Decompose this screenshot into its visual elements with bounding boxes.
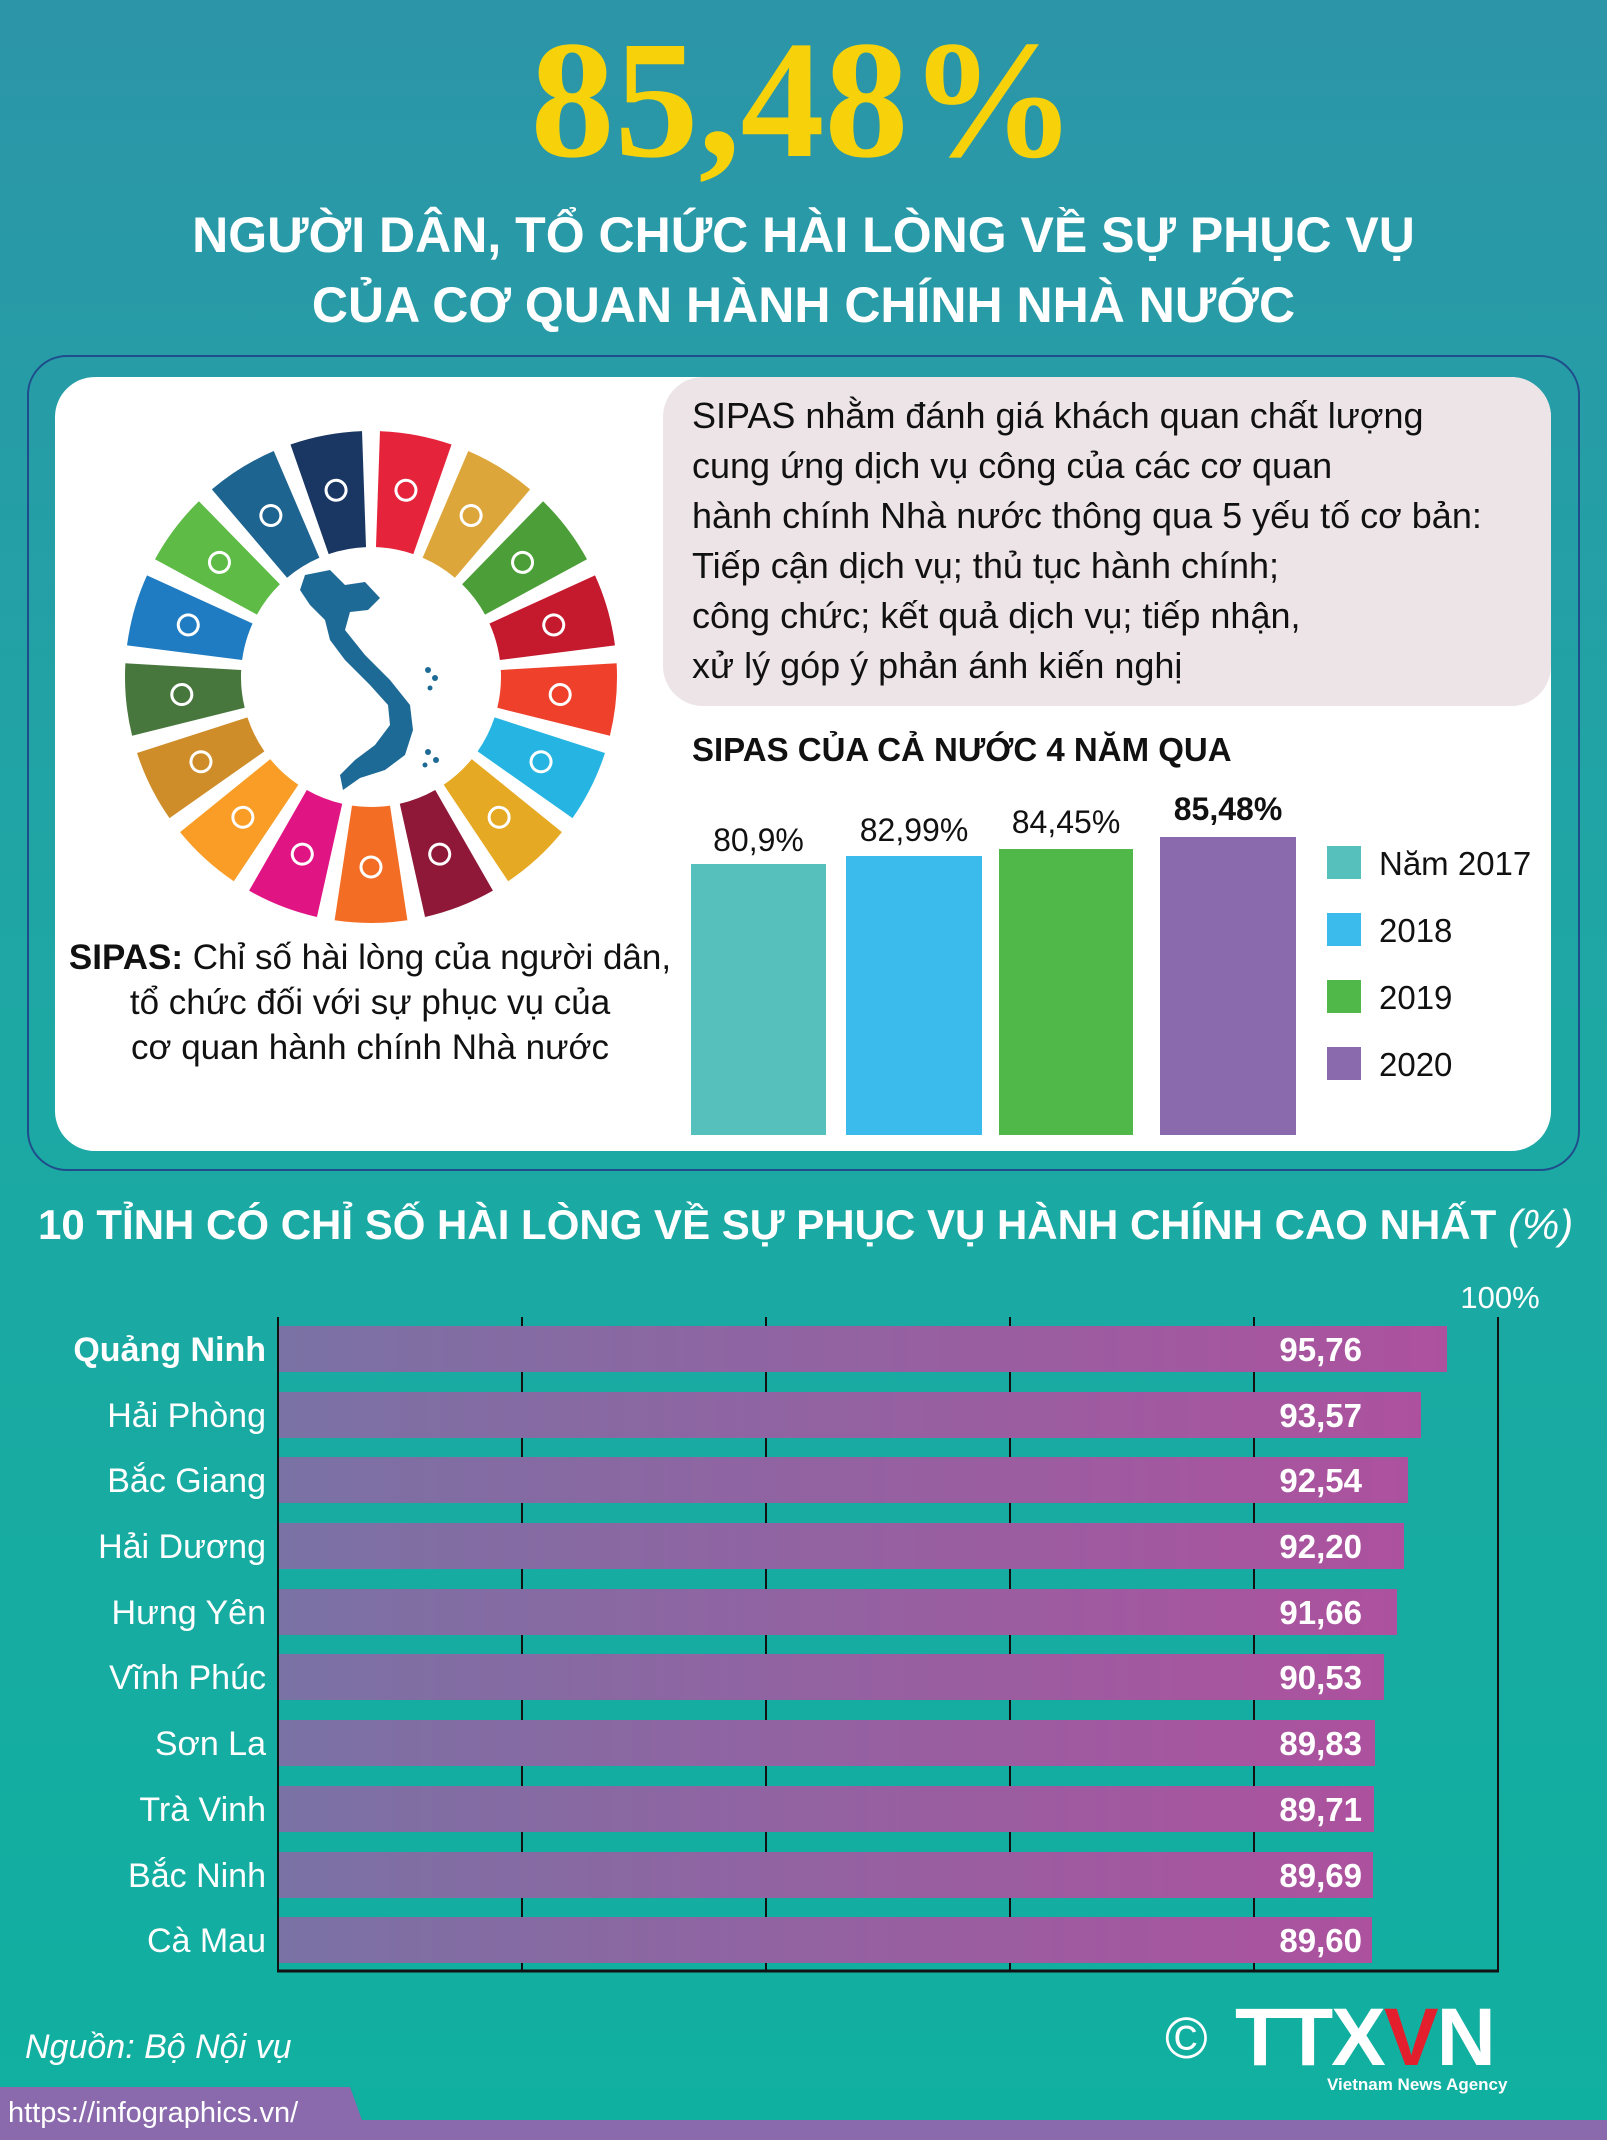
- callout: SIPAS description box: công chức; kết quả dịch vụ; tiếp nhận,: [692, 595, 1300, 636]
- text block: source: Nguồn: Bộ Nội vụ: [25, 2028, 292, 2066]
- legend: 2018: [1379, 912, 1452, 949]
- axis label 100%: 100%: [1460, 1280, 1540, 1315]
- callout: SIPAS description box: hành chính Nhà nước thông qua 5 yếu tố cơ bản:: [692, 495, 1482, 536]
- text block: SIPAS definition: [69, 938, 671, 1067]
- legend: 2019: [1379, 979, 1452, 1016]
- bar 2017: [691, 864, 826, 1135]
- bar chart: top 10 provinces: 92,54: [1279, 1462, 1363, 1499]
- logo: TTXVN: Vietnam News Agency: [1327, 2075, 1507, 2094]
- callout: SIPAS description box: [663, 377, 1551, 706]
- logo: TTXVN: TTXVN: [1235, 1992, 1494, 2083]
- bar chart: top 10 provinces: Hải Phòng: [107, 1397, 266, 1435]
- bar chart: top 10 provinces: Bắc Ninh: [128, 1857, 266, 1895]
- logo: TTXVN: [1165, 1992, 1508, 2094]
- heading: national chart: SIPAS CỦA CẢ NƯỚC 4 NĂM QUA: [692, 731, 1232, 768]
- subtitle: NGƯỜI DÂN, TỔ CHỨC HÀI LÒNG VỀ SỰ PHỤC VỤ: [192, 207, 1415, 263]
- logo: TTXVN: ©: [1165, 2006, 1208, 2071]
- bar chart: top 10 provinces: Bắc Giang: [107, 1462, 266, 1500]
- bar chart: top 10 provinces: Trà Vinh: [139, 1791, 266, 1829]
- bar chart: top 10 provinces: 90,53: [1279, 1659, 1362, 1696]
- bar chart: national SIPAS 2017-2020: 85,48%: [1174, 791, 1282, 827]
- callout: SIPAS description box: SIPAS nhằm đánh giá khách quan chất lượng: [692, 395, 1424, 436]
- bar chart: top 10 provinces: Hải Dương: [98, 1528, 266, 1566]
- text block: SIPAS definition: cơ quan hành chính Nhà nước: [131, 1028, 609, 1067]
- heading: top 10 provinces: 10 TỈNH CÓ CHỈ SỐ HÀI LÒNG VỀ SỰ PHỤC VỤ HÀNH CHÍNH CAO NHẤT (%): [38, 1201, 1573, 1248]
- legend: [1327, 845, 1531, 1083]
- bar chart: national SIPAS 2017-2020: 84,45%: [1012, 804, 1120, 840]
- panel: SIPAS overview: [27, 355, 1580, 1171]
- subtitle: [192, 206, 1415, 333]
- bar chart: top 10 provinces: 89,69: [1279, 1857, 1362, 1894]
- text block: SIPAS definition: SIPAS: Chỉ số hài lòng của người dân,: [69, 938, 671, 977]
- bar chart: top 10 provinces: 91,66: [1279, 1594, 1362, 1631]
- legend: Năm 2017: [1379, 845, 1531, 882]
- callout: SIPAS description box: Tiếp cận dịch vụ; thủ tục hành chính;: [692, 545, 1279, 586]
- bar chart: top 10 provinces: 89,83: [1279, 1725, 1362, 1762]
- footer band: [0, 2087, 1607, 2140]
- text block: url: https://infographics.vn/: [8, 2097, 298, 2129]
- bar chart: top 10 provinces: 95,76: [1279, 1331, 1362, 1368]
- title: big percentage: 85,48%: [530, 7, 1076, 193]
- text block: SIPAS definition: tổ chức đối với sự phục vụ của: [130, 983, 610, 1022]
- bar chart: top 10 provinces: 89,60: [1279, 1922, 1362, 1959]
- bar chart: top 10 provinces: 93,57: [1279, 1397, 1362, 1434]
- bar chart: top 10 provinces: 92,20: [1279, 1528, 1362, 1565]
- white card: [55, 377, 1551, 1151]
- callout: SIPAS description box: cung ứng dịch vụ công của các cơ quan: [692, 445, 1332, 486]
- bar chart: national SIPAS 2017-2020: 80,9%: [713, 822, 804, 858]
- bar chart: top 10 provinces: Hưng Yên: [112, 1594, 266, 1632]
- bar 2020: [1160, 837, 1296, 1135]
- bar chart: national SIPAS 2017-2020: 82,99%: [860, 812, 968, 848]
- icon: SDG wheel with Vietnam map: [125, 431, 617, 923]
- bar chart: top 10 provinces: Cà Mau: [147, 1922, 266, 1960]
- bar 2019: [999, 849, 1133, 1135]
- bar chart: national SIPAS 2017-2020: [691, 791, 1296, 1135]
- bar chart: top 10 provinces: Quảng Ninh: [73, 1331, 266, 1369]
- bar chart: top 10 provinces: 89,71: [1279, 1791, 1362, 1828]
- bar chart: top 10 provinces: [73, 1280, 1540, 1972]
- bar chart: top 10 provinces: Vĩnh Phúc: [109, 1659, 266, 1697]
- callout: SIPAS description box: xử lý góp ý phản ánh kiến nghị: [692, 645, 1182, 686]
- legend: 2020: [1379, 1046, 1452, 1083]
- subtitle: CỦA CƠ QUAN HÀNH CHÍNH NHÀ NƯỚC: [312, 277, 1295, 333]
- bar chart: top 10 provinces: Sơn La: [155, 1725, 266, 1763]
- bar 2018: [846, 856, 982, 1135]
